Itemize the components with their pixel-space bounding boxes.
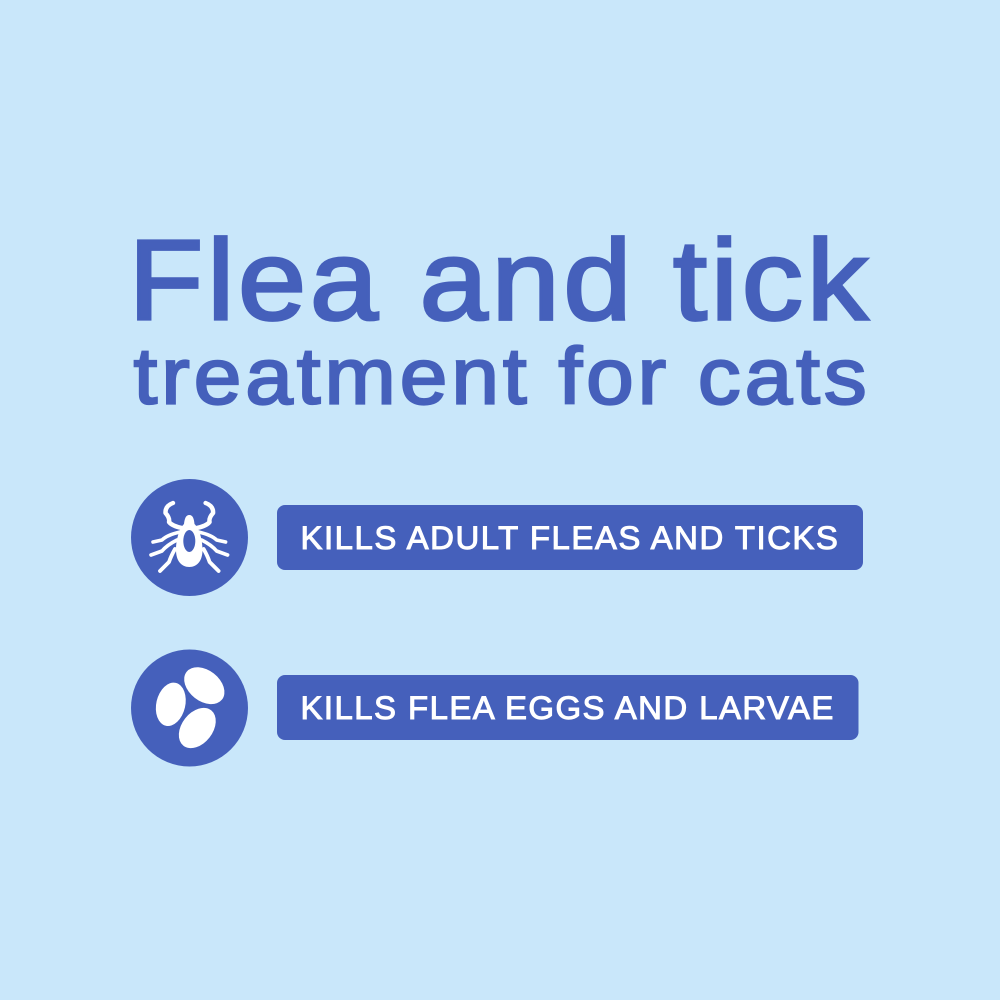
badge: adult fleas and ticks: KILLS ADULT FLEAS AND TICKS (300, 520, 839, 556)
title line 2: treatment for cats (134, 331, 871, 421)
badge: eggs and larvae: KILLS FLEA EGGS AND LARVAE (300, 690, 835, 726)
icon: flea eggs (131, 650, 248, 766)
title line 1: Flea and tick (128, 217, 872, 345)
badge: eggs and larvae (277, 675, 858, 740)
title (128, 217, 872, 421)
badge: adult fleas and ticks (277, 505, 863, 570)
icon: tick (131, 479, 248, 596)
